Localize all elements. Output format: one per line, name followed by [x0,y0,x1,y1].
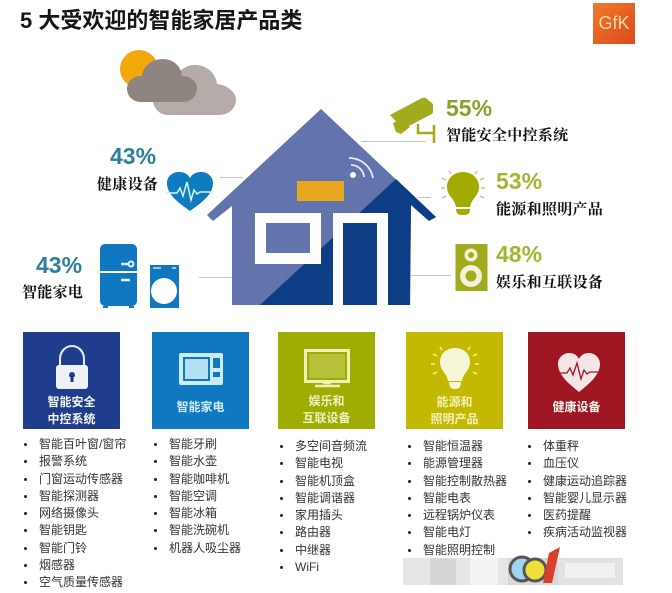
card label: 中控系统 [47,412,96,426]
stat: security 55% [446,95,568,144]
list: entertainment: 智能机顶盒 [295,474,355,488]
list: energy: 智能恒温器 [423,439,483,453]
door [333,213,388,305]
panel: appliance card [152,332,249,429]
card label [47,395,96,426]
stat: energy 53%: 53% [496,168,542,194]
stat: appliances 43%: 43% [36,252,82,278]
list: security: 报警系统 [39,454,87,468]
list: health: 血压仪 [543,456,579,470]
card label: 智能家电 [176,400,224,414]
stat: security 55%: 智能安全中控系统 [446,128,568,144]
icon: speaker [456,244,488,291]
list: entertainment: 路由器 [295,525,331,539]
card label [302,394,350,425]
yellow device [297,181,344,201]
icon: monitor [304,349,350,388]
window [255,213,321,264]
stat: health 43%: 43% [110,143,156,169]
list: security: 网络摄像头 [39,506,99,520]
title: 5 大受欢迎的智能家居产品类 [20,8,302,33]
icon: security camera [390,98,436,143]
list: entertainment: 智能调谐器 [295,491,355,505]
logo: GfK: GfK [598,13,630,33]
list: appliances: 智能水壶 [169,454,217,468]
list: appliances [154,437,241,555]
list: appliances: 机器人吸尘器 [169,541,241,555]
list: entertainment: 多空间音频流 [295,439,367,453]
list: health: 医药提醒 [543,508,591,522]
list: security: 智能门铃 [39,541,87,555]
card label: 互联设备 [302,411,350,425]
card label: 娱乐和 [308,394,344,408]
list: security: 烟感器 [39,558,75,572]
stat: entertainment 48%: 娱乐和互联设备 [496,275,603,291]
list: appliances: 智能咖啡机 [169,472,229,486]
icon: heart [558,353,600,392]
panel: security card [23,332,120,429]
list: health: 智能婴儿显示器 [543,491,627,505]
watermark [403,547,623,585]
icon: light bulb [441,170,485,215]
list: security: 智能钥匙 [39,523,87,537]
stat: health 43%: 健康设备 [97,177,158,193]
list: energy [408,439,507,557]
stat: appliances 43%: 智能家电 [22,285,83,301]
list: entertainment: 智能电视 [295,456,343,470]
icon: wifi [349,158,373,178]
list: appliances: 智能牙刷 [169,437,217,451]
house [207,109,436,305]
stat: entertainment 48%: 48% [496,241,542,267]
list: energy: 智能电表 [423,491,471,505]
card label: 智能安全 [47,395,96,409]
list: appliances: 智能冰箱 [169,506,217,520]
icon: heart [166,172,213,211]
list: appliances: 智能洗碗机 [169,523,229,537]
list: energy: 能源管理器 [423,456,483,470]
card label [430,395,478,426]
icon: fridge and washer [100,244,179,308]
stat: energy 53% [496,168,603,218]
list: energy: 智能电灯 [423,525,471,539]
list: energy: 远程锅炉仪表 [423,508,495,522]
list: security: 智能百叶窗/窗帘 [39,437,126,451]
stat: security 55%: 55% [446,95,492,121]
panel: entertainment card [278,332,375,429]
icon: sun and clouds [120,50,236,115]
list: appliances: 智能空调 [169,489,217,503]
stat: energy 53%: 能源和照明产品 [496,202,603,218]
connector lines [199,141,451,278]
card label: 健康设备 [552,400,600,414]
list: entertainment: 家用插头 [295,508,343,522]
list: entertainment [280,439,367,574]
icon: padlock [56,345,88,389]
icon: microwave [179,353,223,385]
house body and roof [207,109,436,305]
stat: appliances 43% [22,252,83,301]
list: energy: 智能控制散热器 [423,474,507,488]
list: energy: 智能照明控制 [423,543,495,557]
list: health [528,439,627,539]
list: health: 疾病活动监视器 [543,525,627,539]
list: health: 健康运动追踪器 [543,474,627,488]
panel: health card [528,332,625,429]
list: security: 门窗运动传感器 [39,472,123,486]
panel: energy card [406,332,503,429]
list: security: 空气质量传感器 [39,575,123,589]
list: health: 体重秤 [543,439,579,453]
list: entertainment: 中继器 [295,543,331,557]
list: security [24,437,126,589]
logo: GfK [593,3,635,44]
list: entertainment: WiFi [295,560,319,574]
dark roof and wall section [260,179,436,305]
stat: entertainment 48% [496,241,603,291]
stat: health 43% [97,143,158,193]
card label: 照明产品 [430,412,478,426]
card label: 能源和 [436,395,472,409]
list: security: 智能探测器 [39,489,99,503]
icon: bulb with rays [431,346,479,389]
